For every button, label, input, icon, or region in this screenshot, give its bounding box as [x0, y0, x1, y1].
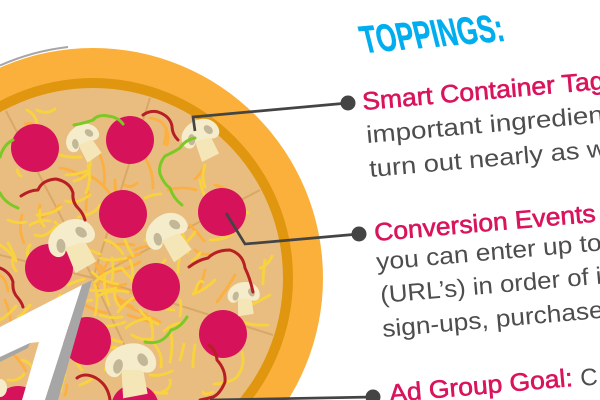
red peppers [0, 111, 253, 400]
text block: conversion events: (URL’s) in order of i [379, 263, 600, 309]
crust [0, 48, 323, 400]
slice cut lines [0, 98, 273, 400]
green peppers [0, 116, 195, 343]
heading: toppings: TOPPINGS: [356, 7, 509, 62]
text block: smart container tag [361, 67, 600, 183]
pizza base [0, 88, 283, 400]
text block: conversion events: Conversion Events [373, 200, 597, 247]
mushrooms [0, 116, 261, 400]
yellow cheese [0, 109, 272, 394]
leader line: smart container tag [193, 96, 356, 131]
text block: smart container tag: Smart Container Tag [361, 67, 600, 116]
pizza [0, 47, 323, 400]
crust inner ring [0, 78, 293, 400]
orange cheese [0, 118, 235, 395]
leader line: ad group goal [210, 390, 380, 400]
text block: conversion events [373, 200, 600, 343]
text block: conversion events: sign-ups, purchase [381, 297, 600, 343]
text block: conversion events: you can enter up to [375, 229, 600, 276]
text block: smart container tag: important ingredient [365, 101, 600, 149]
pepperoni slices [0, 116, 247, 400]
leader line: conversion events [226, 213, 366, 244]
text block: ad group goal: C [579, 364, 599, 392]
plate rim [0, 47, 68, 66]
text block: smart container tag: turn out nearly as w [368, 135, 600, 183]
slice shadow edges [0, 280, 92, 400]
removed slice gap [0, 285, 82, 400]
